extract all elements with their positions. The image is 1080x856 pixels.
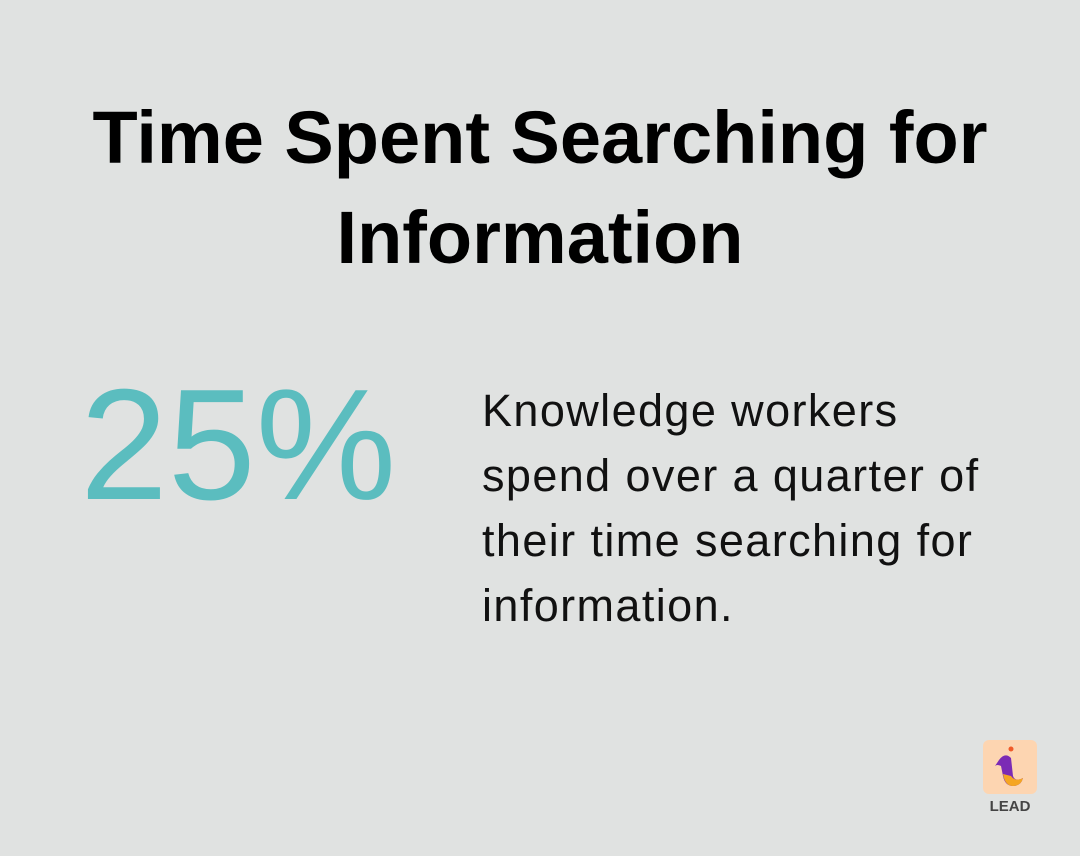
description text: spend over a quarter of [482,450,980,501]
logo: LEAD [983,740,1037,814]
title: Information [337,196,743,279]
description text [482,385,980,631]
description text: Knowledge workers [482,385,898,436]
stat number: 25% [80,357,396,533]
title: Time Spent Searching for [92,96,988,179]
description text: information. [482,580,734,631]
title [92,96,988,279]
description text: their time searching for [482,515,973,566]
